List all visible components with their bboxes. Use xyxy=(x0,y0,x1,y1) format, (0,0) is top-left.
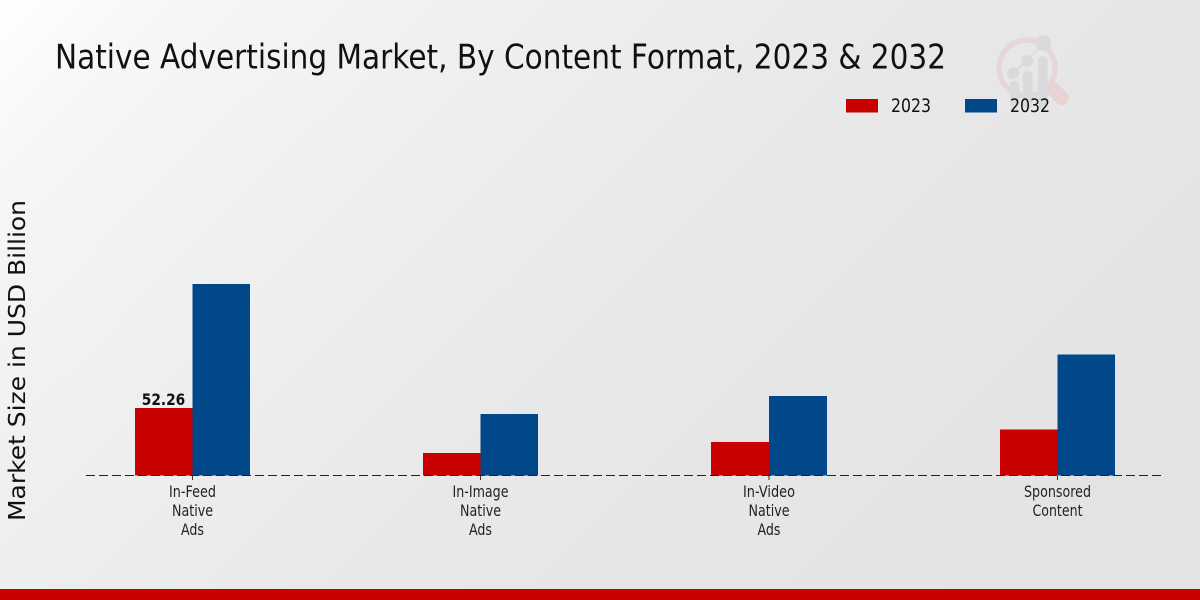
legend: 2023 xyxy=(846,95,931,117)
label: In-Video Native Ads: Native xyxy=(748,501,790,520)
icon: watermark logo xyxy=(999,35,1062,109)
footer bar xyxy=(0,589,1200,600)
label: Sponsored Content: Sponsored xyxy=(1024,482,1091,501)
label: In-Video Native Ads: In-Video xyxy=(743,482,795,501)
bar chart xyxy=(135,284,1115,476)
label: In-Image Native Ads xyxy=(452,482,508,539)
legend: 2032: 2032 xyxy=(1010,95,1050,117)
x axis labels xyxy=(169,482,1091,539)
label: Sponsored Content: Content xyxy=(1032,501,1082,520)
label: Sponsored Content xyxy=(1024,482,1091,520)
label: In-Image Native Ads: In-Image xyxy=(452,482,508,501)
group: In-Image Native Ads xyxy=(423,414,538,476)
group: In-Video Native Ads xyxy=(711,396,827,476)
legend: 2023: 2023 xyxy=(891,95,931,117)
legend xyxy=(846,95,1050,117)
label: In-Video Native Ads xyxy=(743,482,795,539)
label: In-Feed Native Ads: Native xyxy=(172,501,213,520)
title: Native Advertising Market, By Content Format, 2023 & 2032 xyxy=(55,38,946,76)
group: Sponsored Content xyxy=(1000,354,1115,476)
label: In-Feed Native Ads: Ads xyxy=(181,520,204,539)
data label: 52.26 xyxy=(142,390,185,409)
label: In-Feed Native Ads: In-Feed xyxy=(169,482,216,501)
legend: 2032 xyxy=(965,95,1050,117)
group: In-Feed Native Ads xyxy=(135,284,250,476)
label: In-Video Native Ads: Ads xyxy=(758,520,780,539)
y axis label: Market Size in USD Billion xyxy=(3,200,31,521)
label: In-Image Native Ads: Native xyxy=(460,501,501,520)
x axis baseline xyxy=(86,476,1164,480)
label: In-Image Native Ads: Ads xyxy=(469,520,492,539)
label: In-Feed Native Ads xyxy=(169,482,216,539)
